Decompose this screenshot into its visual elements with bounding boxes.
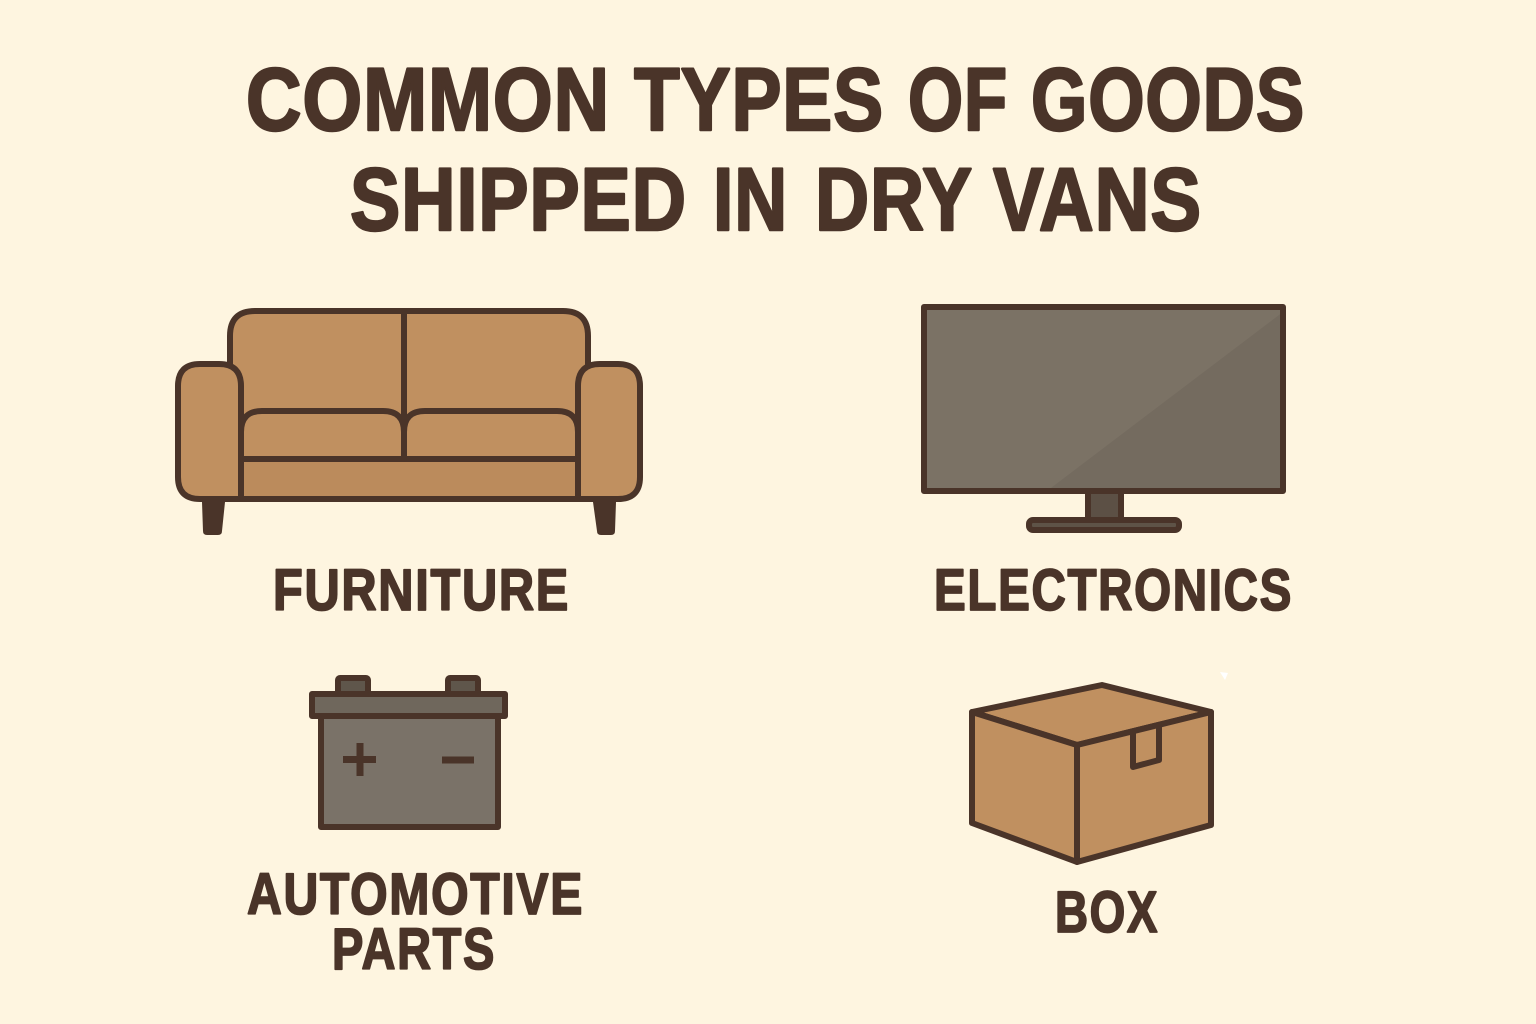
title: VANS <box>993 149 1202 249</box>
icon: car battery <box>312 678 505 827</box>
label: box: BOX <box>1055 880 1159 945</box>
icon: television <box>924 307 1283 530</box>
title <box>246 49 1305 249</box>
title: DRY <box>815 149 973 249</box>
title: OF <box>908 49 1008 149</box>
label: furniture: FURNITURE <box>273 558 570 623</box>
label: automotive parts: PARTS <box>332 917 496 982</box>
title: COMMON <box>246 49 610 149</box>
label: automotive parts: AUTOMOTIVE <box>247 862 584 927</box>
title: IN <box>713 149 788 249</box>
label: automotive parts <box>247 862 584 982</box>
title: TYPES <box>634 49 884 149</box>
title: SHIPPED <box>350 149 687 249</box>
label: electronics: ELECTRONICS <box>934 558 1293 623</box>
title: GOODS <box>1031 49 1305 149</box>
icon: cardboard box <box>972 685 1211 862</box>
icon: sofa <box>178 311 640 535</box>
